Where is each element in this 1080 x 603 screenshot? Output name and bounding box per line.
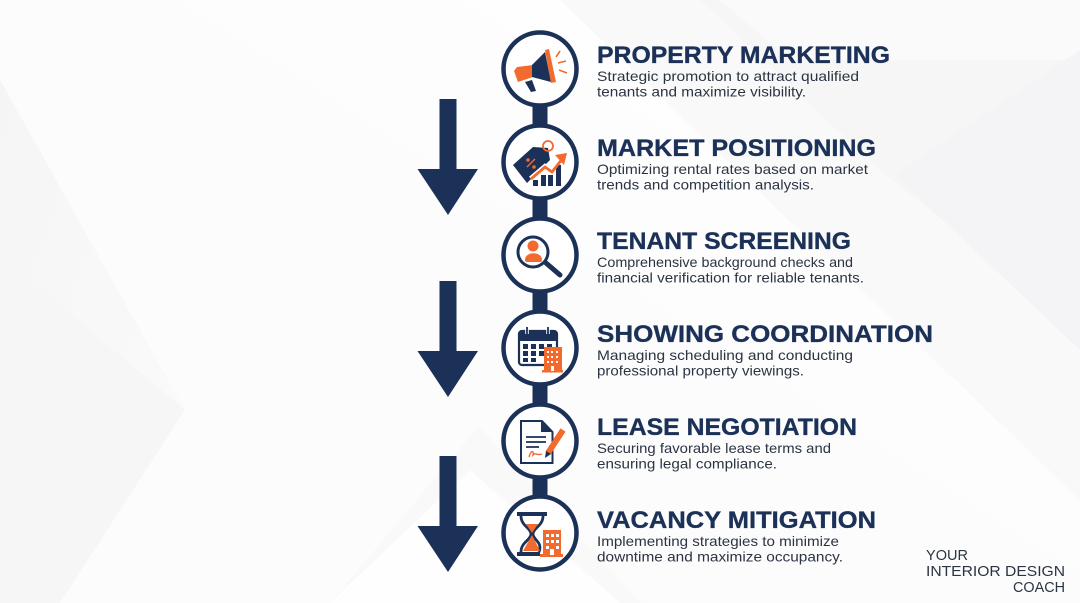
icon: document and pen (504, 404, 576, 478)
description: Strategic promotion to attract qualified (597, 68, 859, 84)
arrow 3 (418, 456, 478, 572)
logo text: INTERIOR DESIGN (926, 563, 1065, 580)
logo text: YOUR (926, 547, 968, 564)
description (597, 533, 843, 564)
description (597, 440, 831, 472)
description (597, 254, 864, 286)
heading: MARKET POSITIONING (597, 135, 876, 162)
step 6: vacancy mitigation (504, 496, 876, 570)
logo text (926, 547, 1065, 596)
step 3: tenant screening (504, 218, 864, 292)
description: ensuring legal compliance. (597, 456, 777, 472)
arrow 1 (418, 99, 478, 215)
description: Securing favorable lease terms and (597, 440, 831, 456)
description: professional property viewings. (597, 362, 804, 378)
arrow 2 (418, 281, 478, 397)
description: Comprehensive background checks and (597, 254, 853, 270)
icon: calendar and building (504, 312, 576, 384)
step 1: property marketing (504, 32, 890, 106)
heading: VACANCY MITIGATION (597, 507, 876, 534)
description (597, 347, 853, 378)
description: Implementing strategies to minimize (597, 533, 839, 549)
description: tenants and maximize visibility. (597, 84, 806, 100)
timeline connector (532, 100, 548, 505)
icon: magnifier with person (504, 218, 576, 292)
step 5: lease negotiation (504, 404, 857, 478)
heading: SHOWING COORDINATION (597, 321, 933, 348)
description: trends and competition analysis. (597, 176, 814, 192)
icon: price tag and chart (504, 126, 576, 198)
heading: TENANT SCREENING (597, 228, 851, 255)
description: downtime and maximize occupancy. (597, 548, 843, 564)
heading: PROPERTY MARKETING (597, 42, 890, 69)
icon: megaphone (504, 32, 576, 106)
icon: hourglass and building (504, 496, 576, 570)
step 2: market positioning (504, 126, 876, 198)
heading: LEASE NEGOTIATION (597, 414, 857, 441)
step 4: showing coordination (504, 312, 933, 384)
logo text: COACH (1013, 579, 1065, 596)
description: Managing scheduling and conducting (597, 347, 853, 363)
description (597, 161, 868, 192)
description: financial verification for reliable tenants. (597, 270, 864, 286)
description (597, 68, 859, 100)
description: Optimizing rental rates based on market (597, 161, 868, 177)
